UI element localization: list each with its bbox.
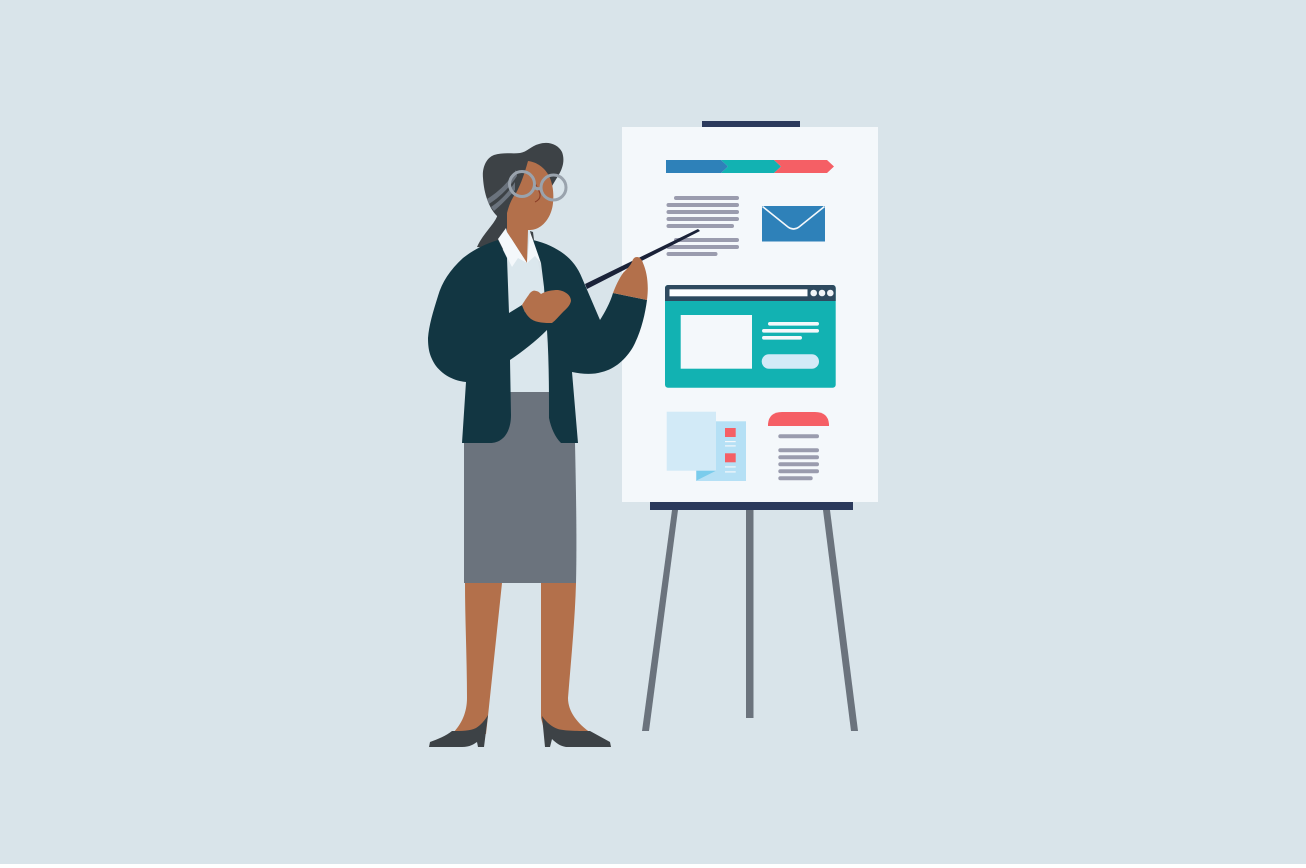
- jacket right: [533, 240, 647, 443]
- hair: [483, 143, 563, 234]
- neck shadow: [530, 231, 534, 240]
- right hand: [613, 257, 648, 300]
- shirt: [505, 250, 549, 392]
- board: [622, 127, 878, 502]
- browser title bar: [665, 285, 836, 301]
- progress arrows: [666, 160, 834, 173]
- jacket left: [428, 240, 552, 443]
- left shoe: [429, 715, 488, 747]
- face and neck: [507, 161, 553, 263]
- window text lines: [762, 322, 819, 340]
- icon: documents: [667, 412, 746, 481]
- easel legs: [642, 510, 858, 731]
- image placeholder: [681, 315, 752, 369]
- easel top clip: [702, 121, 800, 128]
- browser window panel: [665, 285, 836, 388]
- easel base bar: [650, 502, 853, 510]
- ponytail: [477, 214, 512, 250]
- easel: [622, 121, 878, 731]
- left leg: [452, 583, 502, 734]
- figure: presenter: [428, 143, 700, 747]
- text block: upper lines: [666, 196, 739, 256]
- nose: [535, 183, 540, 202]
- left hand: [522, 290, 571, 323]
- right leg: [541, 583, 591, 733]
- right shoe: [542, 716, 611, 747]
- collar: [498, 228, 527, 267]
- icon: envelope: [762, 206, 825, 242]
- hair streaks: [487, 170, 517, 211]
- button: [762, 354, 819, 369]
- window buttons: [810, 290, 834, 296]
- address bar: [670, 289, 808, 296]
- pointer: [585, 229, 700, 289]
- skirt: [464, 392, 576, 583]
- glasses: [510, 172, 566, 200]
- card with red header: [768, 412, 829, 480]
